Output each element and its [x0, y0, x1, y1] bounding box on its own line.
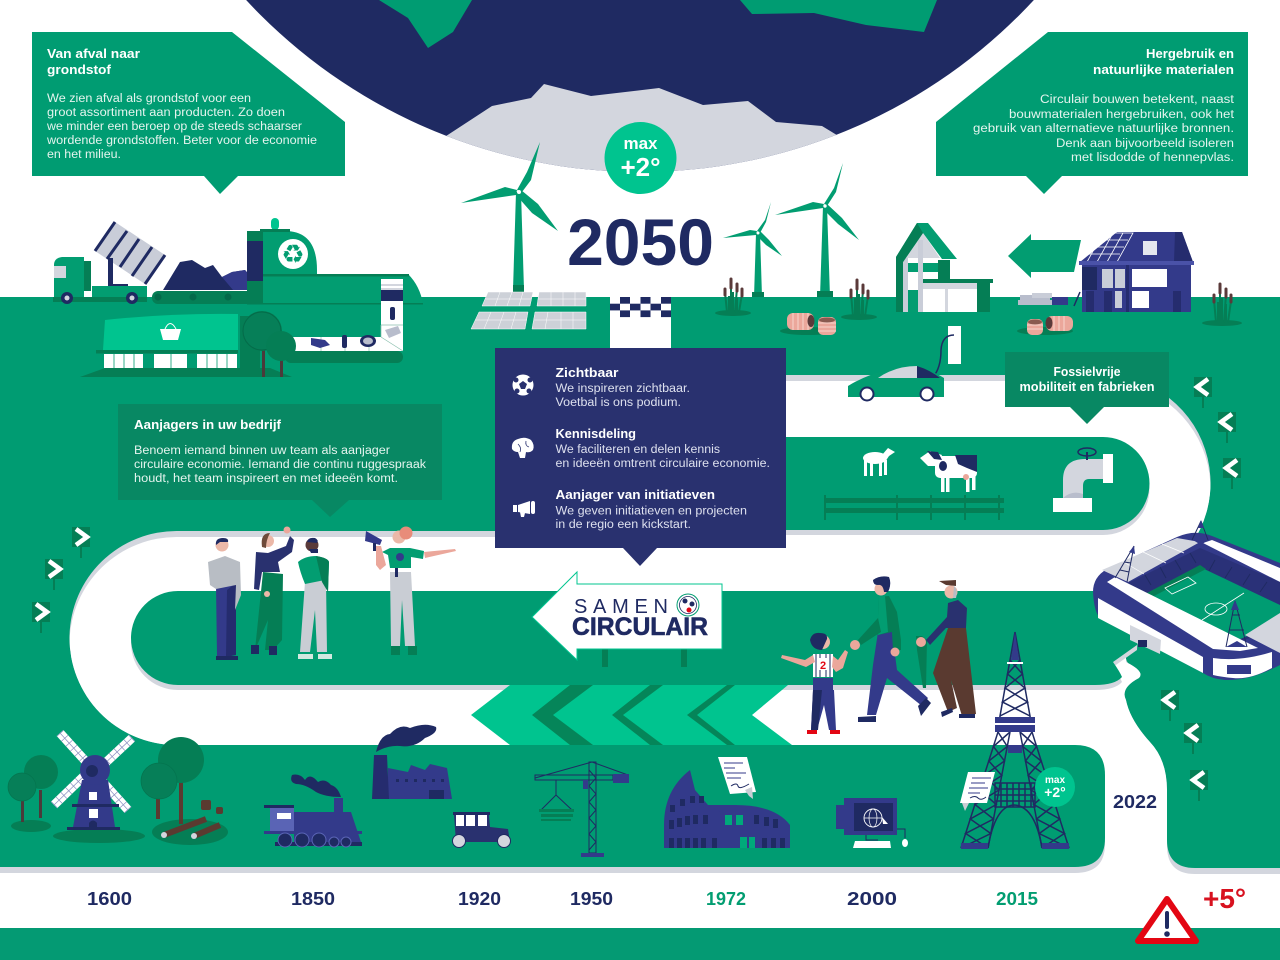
navy info panel: We geven initiatieven en projecten [556, 506, 747, 518]
sign 1 [72, 527, 90, 558]
sign 2 [45, 559, 63, 590]
navy info panel: Kennisdeling [556, 426, 636, 441]
conveyor [152, 291, 264, 304]
person: child with number 2 [781, 633, 848, 734]
front stand [1107, 577, 1258, 651]
conveyor with recycled items [285, 279, 403, 363]
person: elderly man with umbrella [916, 580, 976, 718]
trees left of windmill [8, 755, 58, 832]
vintage car [452, 812, 510, 848]
sign 8 [1184, 723, 1202, 754]
callout: aanjagers in uw bedrijf: Aanjagers in uw bedrijf [134, 417, 282, 432]
callout: van afval naar grondstof: Van afval naar [47, 46, 140, 61]
coal pile [163, 260, 263, 290]
green arrow [1008, 234, 1081, 278]
road [0, 297, 1280, 934]
badge: max +2 degrees: max [623, 134, 658, 153]
navy info panel [495, 348, 786, 566]
warning triangle [1138, 899, 1196, 941]
timeline years: 1850 [291, 889, 335, 909]
timeline years [87, 889, 1038, 909]
badge: max +2 degrees [604, 122, 676, 194]
people group: man with glasses [208, 538, 241, 660]
continent left [379, 0, 472, 48]
timeline years: 2015 [996, 889, 1038, 909]
callout: aanjagers in uw bedrijf: Benoem iemand binnen uw team als aanjager [134, 445, 390, 457]
document above colosseum [718, 757, 756, 799]
timeline years: 1950 [570, 889, 613, 909]
sign 4 [1194, 377, 1212, 408]
icon: basket [160, 324, 181, 340]
heading: 2050: 2050 [567, 205, 714, 279]
navy info panel: We faciliteren en delen kennis [556, 444, 720, 456]
navy info panel: We inspireren zichtbaar. [556, 383, 690, 395]
navy info panel: in de regio een kickstart. [556, 519, 691, 531]
road arrow chevrons [471, 685, 792, 745]
continent right [740, 0, 937, 32]
sign 6 [1223, 458, 1241, 489]
callout: van afval naar grondstof: We zien afval als grondstof voor een [47, 93, 251, 105]
computer [836, 798, 908, 848]
callout: fossielvrije mobiliteit: mobiliteit en fabrieken [1020, 380, 1154, 394]
callout: van afval naar grondstof: en het milieu. [47, 149, 121, 161]
sign: samen circulair logo [532, 572, 722, 667]
callout: hergebruik en natuurlijke materialen: bouwmaterialen hergebruiken, ook het [1009, 109, 1235, 121]
reeds right [1202, 284, 1242, 326]
direction signs lower right [1161, 690, 1208, 801]
badge: max +2 degrees: +2° [620, 152, 661, 182]
icon: megaphone [513, 501, 535, 517]
fence [824, 495, 1004, 520]
polar ice [446, 84, 836, 171]
wind turbine medium [775, 163, 859, 297]
hemp rolls left [780, 313, 836, 335]
timeline years: 1600 [87, 889, 132, 909]
middle green lane [131, 591, 1140, 690]
cow [920, 451, 977, 492]
reeds left [715, 279, 751, 316]
bottom green bar [0, 928, 1280, 960]
navy info panel: Aanjager van initiatieven [556, 487, 715, 502]
badge small: max +2 degrees: +2° [1044, 784, 1066, 800]
stadium [1093, 520, 1280, 680]
green landscape [0, 297, 1280, 937]
old factory [372, 725, 452, 799]
eiffel tower [961, 632, 1069, 849]
blue house [1074, 232, 1194, 312]
badge small: max +2 degrees: max [1045, 775, 1065, 786]
reeds middle [841, 280, 877, 320]
direction signs left [32, 527, 90, 633]
sign 3 [32, 602, 50, 633]
upper green lane [500, 437, 1150, 535]
sign: samen circulair logo: SAMEN [574, 596, 668, 618]
truck [53, 222, 165, 304]
steam train [264, 775, 362, 847]
navy info panel: Zichtbaar [556, 365, 618, 380]
direction signs upper right [1194, 377, 1241, 489]
windmill [53, 733, 145, 843]
document at eiffel tower [960, 772, 995, 811]
timeline years: 1972 [706, 889, 746, 909]
green house [896, 223, 993, 312]
callout: hergebruik en natuurlijke materialen: Circulair bouwen betekent, naast [1040, 94, 1235, 106]
tower crane [535, 762, 629, 857]
goat [863, 448, 895, 476]
navy info panel: Voetbal is ons podium. [556, 397, 681, 409]
earth globe [246, 0, 1034, 171]
finish checker flag [610, 297, 671, 317]
sign 7 [1161, 690, 1179, 721]
callout: van afval naar grondstof [32, 32, 345, 194]
callout: van afval naar grondstof: we minder een beroep op de steeds schaarser [46, 121, 302, 133]
stadium gate [1130, 625, 1161, 654]
wind turbine large [461, 142, 558, 297]
sign: samen circulair logo: CIRCULAIR [572, 613, 708, 641]
callout: aanjagers in uw bedrijf [118, 404, 442, 517]
icon: football [512, 374, 534, 396]
back stand roof [1102, 538, 1200, 582]
callout: aanjagers in uw bedrijf: circulaire economie. Iemand die continu ruggespraak [134, 459, 426, 471]
callout: aanjagers in uw bedrijf: houdt, het team inspireert en met ideeën komt. [134, 473, 398, 485]
callout: van afval naar grondstof: grondstof [47, 62, 112, 77]
timeline years: 1920 [458, 889, 501, 909]
factory building [247, 231, 423, 304]
water pipe [1053, 448, 1113, 512]
callout: hergebruik en natuurlijke materialen: Hergebruik en [1146, 46, 1234, 61]
callout: hergebruik en natuurlijke materialen: Denk aan bijvoorbeeld isoleren [1056, 138, 1234, 150]
year label 2022: 2022 [1113, 792, 1157, 812]
lower green lane [0, 745, 1105, 873]
icon: recycling: ♻ [281, 240, 305, 270]
colosseum [664, 770, 790, 848]
person: woman waving [251, 526, 294, 655]
person: woman with megaphone [365, 526, 456, 655]
electric car [848, 326, 961, 402]
timeline years: 2000 [847, 889, 897, 909]
person: child with number 2: 2 [820, 660, 826, 672]
icon: brain [512, 438, 534, 458]
callout: fossielvrije mobiliteit [1005, 352, 1169, 424]
pitch [1147, 567, 1280, 640]
callout: hergebruik en natuurlijke materialen: gebruik van alternatieve natuurlijke bronnen. [973, 123, 1234, 135]
wind turbine small [723, 202, 782, 297]
warning value +5 degrees: +5° [1203, 883, 1246, 914]
logo ball [677, 594, 699, 616]
stands [1125, 548, 1280, 642]
solar panels [471, 292, 586, 329]
trees [242, 311, 296, 377]
floodlights [1115, 521, 1247, 647]
stacked insulation [1018, 293, 1068, 305]
callout: hergebruik en natuurlijke materialen: natuurlijke materialen [1093, 62, 1234, 77]
supermarket [80, 314, 292, 377]
callout: hergebruik en natuurlijke materialen: met lisdodde of hennepvlas. [1071, 152, 1234, 164]
callout: van afval naar grondstof: groot assortiment aan producten. Zo doen [47, 107, 285, 119]
person: walking man [850, 576, 931, 722]
navy info panel: en ideeën omtrent circulaire economie. [556, 458, 770, 470]
callout: van afval naar grondstof: wordende grondstoffen. Beter voor de economie [46, 135, 317, 147]
badge small: max +2 degrees [1035, 767, 1075, 807]
sign 9 [1190, 770, 1208, 801]
callout: hergebruik en natuurlijke materialen [936, 32, 1248, 194]
callout: fossielvrije mobiliteit: Fossielvrije [1054, 365, 1121, 379]
circular factory [53, 218, 423, 377]
trees and logs [141, 737, 228, 845]
sign 5 [1218, 412, 1236, 443]
hemp rolls right [1017, 316, 1073, 335]
person: man with beard [298, 538, 332, 659]
